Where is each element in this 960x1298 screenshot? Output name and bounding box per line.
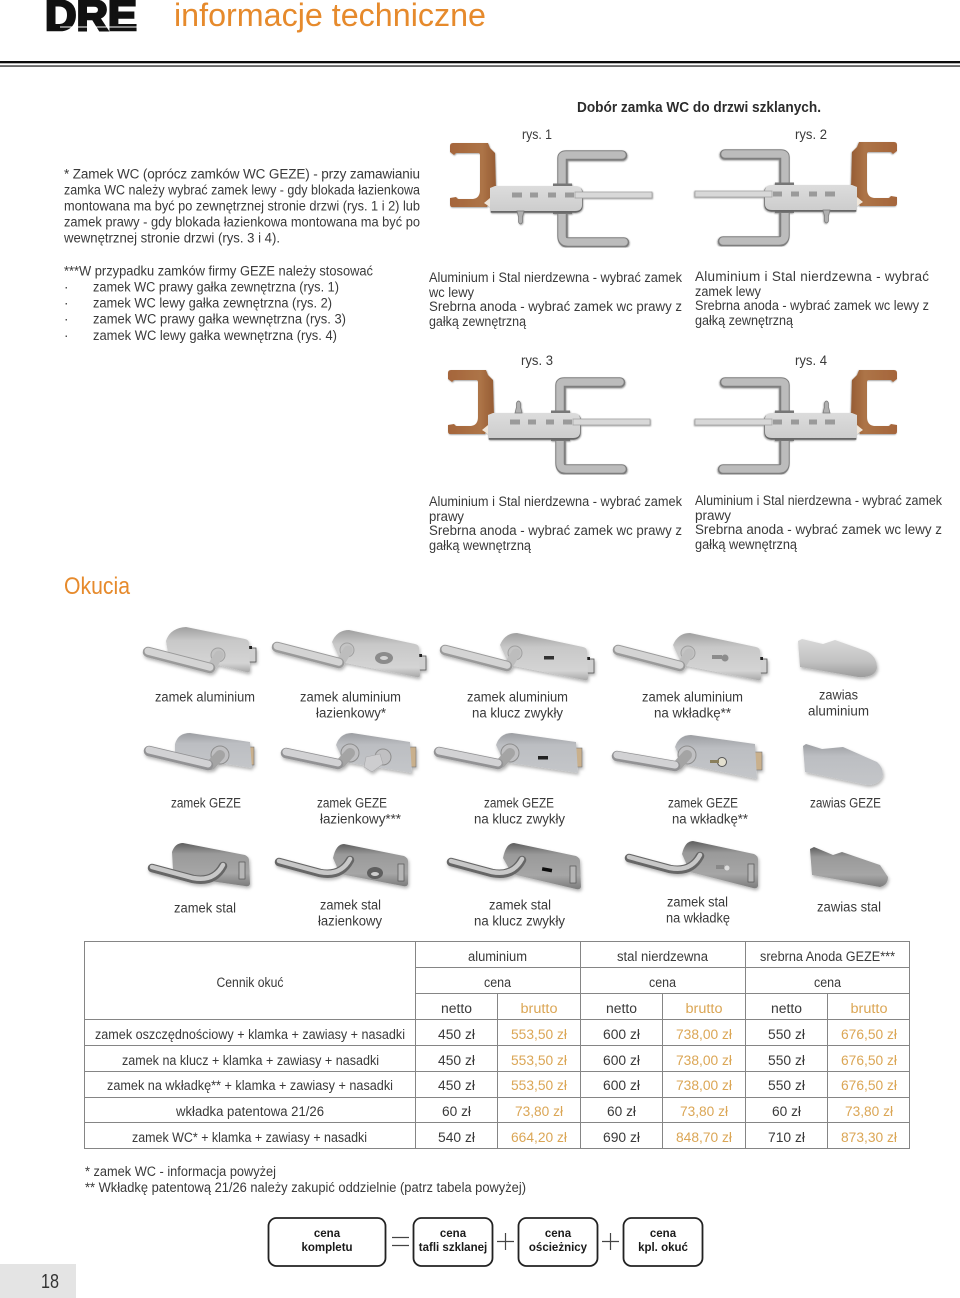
table row: zamek na wkładkę — [107, 1078, 897, 1093]
lock: zamek stal łazienkowy — [279, 844, 408, 928]
table header: netto — [771, 1001, 802, 1016]
box: cena kpl. okuć: kpl. okuć — [638, 1242, 689, 1254]
note: WC lock selection: montowana ma być po zewnętrznej stronie drzwi (rys. 1 i 2) lub — [64, 198, 420, 214]
lock: zamek aluminium łazienkowy — [277, 630, 426, 720]
table header: brutto — [520, 1001, 558, 1016]
note: GEZE locks: zamek WC prawy gałka zewnętrzna (rys. 1) — [93, 280, 339, 294]
table row: zamek oszczędnościowy: 738,00 zł — [676, 1027, 732, 1042]
hinge: zawias aluminium — [798, 639, 877, 718]
lock: zamek GEZE na klucz zwykły: zamek GEZE — [484, 796, 554, 810]
note: GEZE locks: ***W przypadku zamków firmy GEZE należy stosować — [64, 264, 373, 278]
caption: rys. 2: Aluminium i Stal nierdzewna - wybrać — [695, 269, 929, 284]
table row: zamek oszczędnościowy: 600 zł — [603, 1027, 640, 1042]
sign: equals — [392, 1238, 409, 1246]
page number — [0, 1264, 76, 1298]
caption: rys. 4: Aluminium i Stal nierdzewna - wybrać zamek — [695, 493, 942, 508]
lock: zamek GEZE na klucz zwykły: na klucz zwykły — [474, 812, 565, 826]
lock: zamek stal łazienkowy: łazienkowy — [318, 914, 382, 928]
lock: zamek stal na wkładkę — [629, 841, 758, 926]
table row: zamek WC: zamek WC* + klamka + zawiasy + nasadki — [132, 1130, 367, 1145]
hinge: zawias GEZE — [803, 744, 883, 810]
box: cena kpl. okuć — [624, 1218, 702, 1266]
table header: cena — [484, 975, 511, 990]
lock: zamek GEZE łazienkowy: łazienkowy*** — [320, 812, 402, 826]
lock: zamek aluminium łazienkowy: łazienkowy* — [316, 706, 387, 720]
lock: zamek GEZE łazienkowy — [286, 733, 416, 826]
lock: zamek GEZE na wkładkę: na wkładkę** — [672, 812, 749, 826]
lock: zamek stal na wkładkę: na wkładkę — [666, 910, 730, 926]
note: GEZE locks: · — [64, 280, 68, 294]
lock: zamek aluminium na klucz zwykły: zamek aluminium — [467, 690, 568, 704]
footnotes: ** Wkładkę patentową 21/26 należy zakupić oddzielnie (patrz tabela powyżej) — [85, 1180, 526, 1195]
caption: rys. 3: prawy — [429, 509, 464, 524]
table row: zamek na wkładkę: zamek na wkładkę** + klamka + zawiasy + nasadki — [107, 1078, 393, 1093]
table row: zamek oszczędnościowy: 553,50 zł — [511, 1027, 567, 1042]
caption: rys. 3: gałką wewnętrzną — [429, 538, 531, 553]
table row: zamek oszczędnościowy — [95, 1027, 897, 1042]
caption: rys. 4: prawy — [695, 508, 731, 523]
lock: zamek GEZE na wkładkę — [617, 735, 762, 826]
table row: zamek na wkładkę: 450 zł — [438, 1078, 475, 1093]
figure: rys. 3 — [448, 353, 650, 470]
table header: aluminium — [468, 949, 527, 964]
lock: zamek GEZE łazienkowy: zamek GEZE — [317, 796, 387, 810]
box: cena kompletu: cena — [314, 1228, 341, 1240]
table row: zamek na klucz: 738,00 zł — [676, 1053, 732, 1068]
note: WC lock selection: zamka WC należy wybrać zamek lewy - gdy blokada łazienkowa — [64, 182, 420, 198]
caption: rys. 2: Srebrna anoda - wybrać zamek wc lewy z — [695, 298, 929, 313]
box: cena tafli szklanej — [414, 1218, 492, 1266]
lock: zamek aluminium na wkładkę: zamek aluminium — [642, 690, 743, 704]
table row: zamek oszczędnościowy: 676,50 zł — [841, 1027, 897, 1042]
box: cena tafli szklanej: cena — [440, 1228, 467, 1240]
caption: rys. 1: gałką zewnętrzną — [429, 314, 526, 329]
lock: zamek aluminium łazienkowy: zamek aluminium — [300, 690, 401, 704]
caption: rys. 1: Srebrna anoda - wybrać zamek wc prawy z — [429, 299, 682, 314]
box: cena ościeżnicy: ościeżnicy — [529, 1242, 588, 1254]
table row: zamek WC: 664,20 zł — [511, 1130, 567, 1145]
footnotes: * zamek WC - informacja powyżej — [85, 1164, 276, 1179]
note: WC lock selection: * Zamek WC (oprócz zamków WC GEZE) - przy zamawianiu — [64, 166, 420, 182]
lock: zamek stal na klucz zwykły — [451, 843, 581, 928]
lock: zamek aluminium na wkładkę: na wkładkę** — [654, 706, 732, 720]
lock: zamek GEZE: zamek GEZE — [171, 796, 241, 810]
note: GEZE locks — [64, 264, 373, 343]
caption: rys. 4 — [695, 493, 942, 552]
table header: netto — [606, 1001, 637, 1016]
table: Cennik okuć — [84, 942, 910, 1148]
table row: zamek na klucz: 676,50 zł — [841, 1053, 897, 1068]
footnotes — [85, 1164, 526, 1195]
table header: brutto — [686, 1001, 722, 1016]
box: cena ościeżnicy: cena — [545, 1228, 572, 1240]
table row: wkładka patentowa: 60 zł — [442, 1104, 471, 1119]
table row: zamek oszczędnościowy: 450 zł — [438, 1027, 475, 1042]
table row: zamek na klucz: 450 zł — [438, 1053, 475, 1068]
heading: glass door lock selection: Dobór zamka WC do drzwi szklanych. — [577, 100, 821, 116]
hinge: zawias stal: zawias stal — [817, 900, 881, 914]
figure: rys. 4 — [695, 353, 897, 470]
caption: rys. 3: Aluminium i Stal nierdzewna - wybrać zamek — [429, 494, 682, 509]
table header: netto — [441, 1001, 472, 1016]
table row: zamek na wkładkę: 738,00 zł — [676, 1078, 732, 1093]
table row: zamek na wkładkę: 550 zł — [768, 1078, 805, 1093]
box: cena ościeżnicy — [518, 1218, 598, 1266]
table row: zamek oszczędnościowy: zamek oszczędnościowy + klamka + zawiasy + nasadki — [95, 1027, 405, 1042]
lock: zamek GEZE na klucz zwykły — [439, 733, 582, 826]
sign: plus — [497, 1233, 514, 1250]
table row: wkładka patentowa: 73,80 zł — [515, 1104, 563, 1119]
table row: zamek na klucz: 553,50 zł — [511, 1053, 567, 1068]
table row: zamek WC: 873,30 zł — [841, 1130, 897, 1145]
table row: wkładka patentowa: wkładka patentowa 21/26 — [175, 1104, 324, 1119]
box: cena kompletu: kompletu — [301, 1242, 353, 1254]
caption: rys. 4: Srebrna anoda - wybrać zamek wc lewy z — [695, 522, 942, 537]
caption: rys. 3: Srebrna anoda - wybrać zamek wc prawy z — [429, 523, 682, 538]
lock: zamek stal na klucz zwykły: na klucz zwykły — [474, 914, 565, 928]
table row: zamek WC: 540 zł — [438, 1130, 475, 1145]
table row: zamek oszczędnościowy: 550 zł — [768, 1027, 805, 1042]
table header — [216, 949, 896, 1016]
caption: rys. 2: zamek lewy — [695, 284, 761, 299]
sign: plus — [602, 1233, 619, 1250]
caption: rys. 4: gałką wewnętrzną — [695, 537, 797, 552]
table row: wkładka patentowa: 73,80 zł — [845, 1104, 893, 1119]
caption: rys. 3 — [429, 494, 682, 553]
note: GEZE locks: · — [64, 328, 68, 343]
table header: srebrna Anoda GEZE*** — [760, 949, 896, 964]
formula: price of set — [268, 1218, 702, 1266]
lock: zamek aluminium — [148, 627, 256, 704]
table header: Cennik okuć — [216, 975, 284, 990]
lock: zamek stal na wkładkę: zamek stal — [667, 894, 728, 910]
note: GEZE locks: zamek WC prawy gałka wewnętrzna (rys. 3) — [93, 312, 346, 326]
box: cena kompletu — [268, 1218, 386, 1266]
note: WC lock selection — [63, 166, 420, 246]
lock: zamek stal: zamek stal — [174, 900, 236, 916]
note: WC lock selection: zamek prawy - gdy blokada łazienkowa montowana ma być po — [64, 214, 420, 230]
note: WC lock selection: wewnętrznej stronie drzwi (rys. 3 i 4). — [63, 230, 280, 246]
table row: zamek na wkładkę: 600 zł — [603, 1078, 640, 1093]
table row: zamek na wkładkę: 553,50 zł — [511, 1078, 567, 1093]
lock: zamek aluminium na klucz zwykły — [445, 633, 594, 720]
hinge: zawias aluminium: aluminium — [808, 704, 869, 718]
note: GEZE locks: · — [64, 296, 68, 310]
hinge: zawias stal — [810, 847, 888, 914]
table row: zamek na klucz — [122, 1053, 897, 1068]
lock: zamek aluminium: zamek aluminium — [155, 690, 255, 704]
figure: rys. 3: rys. 3 — [521, 353, 553, 368]
lock: zamek GEZE — [149, 733, 254, 810]
note: GEZE locks: zamek WC lewy gałka zewnętrzna (rys. 2) — [93, 296, 332, 310]
table row: wkładka patentowa: 60 zł — [772, 1104, 801, 1119]
table row: zamek na klucz: 550 zł — [768, 1053, 805, 1068]
box: cena kpl. okuć: cena — [650, 1228, 677, 1240]
figure: rys. 2 — [695, 127, 897, 242]
table header: brutto — [850, 1001, 888, 1016]
table header: cena — [814, 975, 841, 990]
figure: rys. 4: rys. 4 — [795, 353, 827, 368]
caption: rys. 2: gałką zewnętrzną — [695, 313, 793, 328]
lock: zamek stal łazienkowy: zamek stal — [320, 898, 381, 912]
box: cena tafli szklanej: tafli szklanej — [419, 1242, 487, 1254]
caption: rys. 2 — [695, 269, 929, 328]
caption: rys. 1 — [428, 270, 682, 329]
table row: zamek WC: 848,70 zł — [676, 1130, 732, 1145]
table row: wkładka patentowa — [175, 1104, 893, 1119]
hinge: zawias GEZE: zawias GEZE — [810, 796, 881, 810]
table row: zamek WC — [132, 1130, 897, 1145]
caption: rys. 1: wc lewy — [428, 285, 474, 300]
heading: Okucia: Okucia — [64, 573, 131, 600]
table row: zamek WC: 710 zł — [768, 1130, 805, 1145]
figure: rys. 1 — [450, 127, 652, 242]
table row: zamek WC: 690 zł — [603, 1130, 640, 1145]
table row: zamek na klucz: 600 zł — [603, 1053, 640, 1068]
table row: zamek na klucz: zamek na klucz + klamka + zawiasy + nasadki — [122, 1053, 379, 1068]
caption: rys. 1: Aluminium i Stal nierdzewna - wybrać zamek — [429, 270, 682, 285]
lock: zamek aluminium na klucz zwykły: na klucz zwykły — [472, 706, 563, 720]
table header: cena — [649, 975, 676, 990]
lock: zamek stal na klucz zwykły: zamek stal — [489, 898, 551, 912]
figure: rys. 1: rys. 1 — [522, 127, 552, 142]
note: GEZE locks: zamek WC lewy gałka wewnętrzna (rys. 4) — [93, 328, 337, 343]
lock: zamek aluminium na wkładkę — [618, 633, 767, 720]
lock: zamek stal — [152, 843, 250, 916]
figure: rys. 2: rys. 2 — [795, 127, 827, 142]
table row: zamek na wkładkę: 676,50 zł — [841, 1078, 897, 1093]
hinge: zawias aluminium: zawias — [819, 688, 858, 702]
table row: wkładka patentowa: 60 zł — [607, 1104, 636, 1119]
table header: stal nierdzewna — [617, 949, 708, 964]
table row: wkładka patentowa: 73,80 zł — [680, 1104, 728, 1119]
lock: zamek GEZE na wkładkę: zamek GEZE — [668, 796, 738, 810]
note: GEZE locks: · — [64, 312, 68, 326]
page number: 18 — [41, 1271, 59, 1293]
